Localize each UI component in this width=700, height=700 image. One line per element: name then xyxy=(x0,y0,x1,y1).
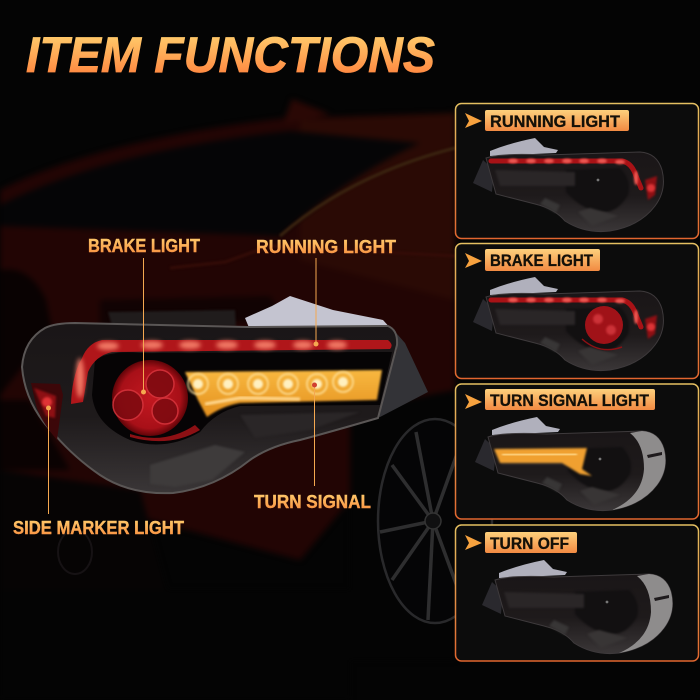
icon: arrow xyxy=(465,253,482,268)
panel: turn off xyxy=(456,525,698,661)
red running strip xyxy=(71,340,392,404)
label pill: BRAKE LIGHT xyxy=(490,251,594,270)
callout: turn signal: TURN SIGNAL xyxy=(254,492,371,512)
rear wheel xyxy=(378,419,492,623)
icon: arrow xyxy=(465,394,482,409)
label pill: TURN SIGNAL LIGHT xyxy=(490,391,650,410)
red brake lens xyxy=(112,360,200,441)
tail light: running on xyxy=(473,138,663,232)
callout: running light: RUNNING LIGHT xyxy=(256,237,396,257)
label pill: TURN OFF xyxy=(490,534,569,553)
panel: running light xyxy=(456,104,698,238)
tail light: turn signal on xyxy=(475,417,665,511)
title: ITEM FUNCTIONS xyxy=(26,27,435,83)
tail light: off xyxy=(482,560,672,654)
side marker xyxy=(31,383,63,440)
smoked lower reflectors xyxy=(150,412,360,487)
callout: side marker light: SIDE MARKER LIGHT xyxy=(13,518,184,538)
label pill: RUNNING LIGHT xyxy=(490,112,621,131)
main tail light xyxy=(22,296,428,493)
panel: turn signal light xyxy=(456,384,698,519)
icon: arrow xyxy=(465,113,482,128)
panel: brake light xyxy=(456,244,698,378)
amber turn signal xyxy=(185,370,382,417)
tail light: brake on xyxy=(473,277,663,371)
icon: arrow xyxy=(465,535,482,550)
inner smoked lens xyxy=(92,352,392,444)
dark outer wing xyxy=(372,326,428,417)
lamp body xyxy=(22,323,397,493)
callout: running light xyxy=(256,237,396,346)
callout: brake light xyxy=(88,236,200,394)
callout: side marker light xyxy=(13,406,184,538)
silver fin xyxy=(245,296,392,330)
callout: brake light: BRAKE LIGHT xyxy=(88,236,200,256)
callout: turn signal xyxy=(254,382,371,512)
